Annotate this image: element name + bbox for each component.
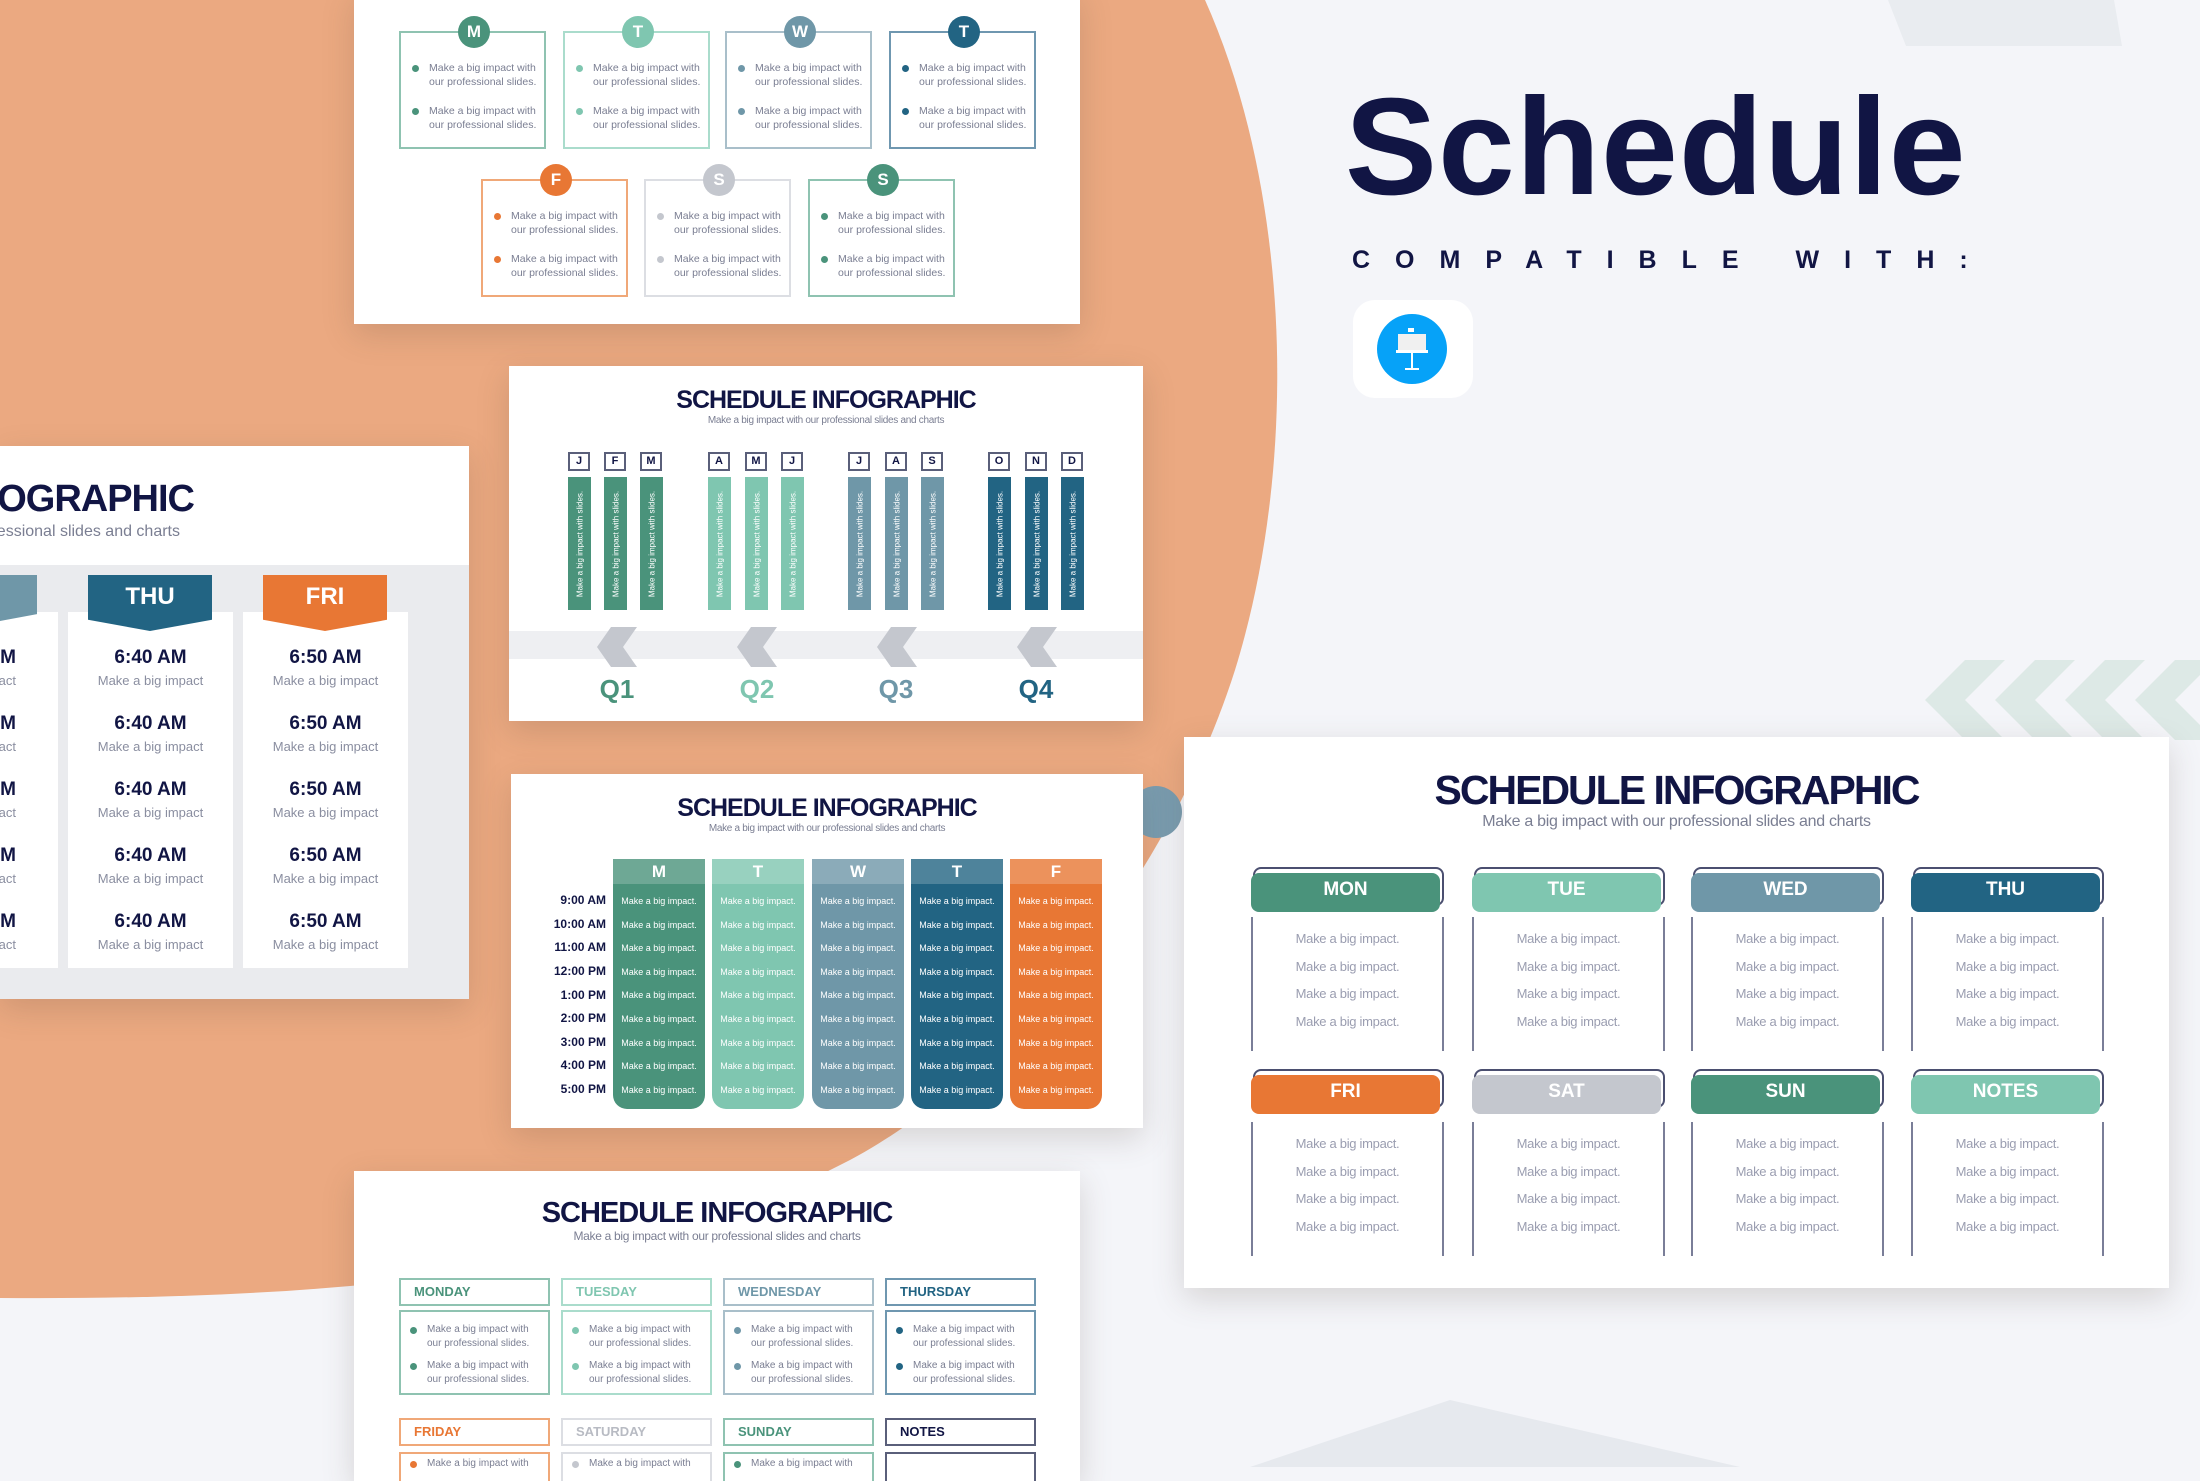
TUE header [1472,867,1665,912]
text: Make a big impact. [820,1038,896,1048]
panel: weekly planner (right): Make a big impact. [1956,1164,2059,1179]
timeline band [509,631,1143,659]
text: Make a big impact. [1018,896,1094,906]
panel: quarterly schedule [509,366,1143,721]
box S2 [808,179,955,297]
FRI header: FRI [1330,1081,1361,1102]
THU times: Make a big impact [98,739,203,754]
text: 5:00 PM [561,1082,606,1096]
text: Make a big impact. [919,896,995,906]
TUESDAY: TUESDAY [576,1284,637,1299]
TUE header: TUE [1548,879,1586,900]
FRI times: Make a big impact [273,673,378,688]
box T2: Make a big impact with [919,105,1026,117]
heading: SCHEDULE INFOGRAPHIC [1435,767,1918,813]
text: Make a big impact. [919,1014,995,1024]
FRI times: Make a big impact [273,739,378,754]
row2 contents: Make a big impact. [1296,1164,1399,1179]
THU header: THU [1986,879,2025,900]
THU times: 6:40 AM [114,713,187,734]
text: Make a big impact. [720,1038,796,1048]
THU times: Make a big impact [98,937,203,952]
text: D [1068,455,1076,467]
row1 contents: Make a big impact. [1296,986,1399,1001]
box S: Make a big impact with [674,253,781,265]
panel: daily boxes (bottom): Make a big impact with [427,1458,529,1469]
decorative chevrons right [1925,660,2200,740]
text: A [892,455,900,467]
text: Make a big impact. [720,920,796,930]
box T2: Make a big impact with [919,62,1026,74]
text: Make a big impact. [820,1061,896,1071]
panel: daily boxes (bottom): our professional slides. [427,1338,529,1349]
box F: Make a big impact with [511,253,618,265]
panel: weekly planner (right): Make a big impact. [1736,959,1839,974]
text: Make a big impact. [720,1061,796,1071]
text: Make a big impact with slides. [611,490,620,597]
box S2: Make a big impact with [838,210,945,222]
panel: weekly planner (right): Make a big impact. [1956,959,2059,974]
grey area: THU [125,583,175,610]
THU times: Make a big impact [98,673,203,688]
text: Make a big impact. [621,967,697,977]
text: Make a big impact. [621,1085,697,1095]
FRI times: 6:50 AM [289,713,362,734]
text: Q1 [600,674,634,704]
panel: left time columns [0,446,469,999]
text: 2:00 PM [561,1011,606,1025]
row2 contents [1251,1122,1444,1256]
box F [481,179,628,297]
panel: daily boxes (bottom) [354,1171,1080,1481]
panel: weekly planner (right): Make a big impact. [1517,1219,1620,1234]
text: Make a big impact. [621,943,697,953]
panel: daily boxes (bottom): our professional slides. [427,1374,529,1385]
panel: daily boxes (bottom): Make a big impact with [913,1324,1015,1335]
box F: F [551,170,561,189]
text: Make a big impact. [919,920,995,930]
text: Make a big impact. [919,1061,995,1071]
time labels [554,893,606,1096]
MONDAY: MONDAY [414,1284,471,1299]
row1 contents: Make a big impact. [1296,931,1399,946]
text: Make a big impact. [720,967,796,977]
heading: SCHEDULE INFOGRAPHIC [676,386,976,414]
panel: daily boxes (bottom): Make a big impact with [589,1458,691,1469]
box S: our professional slides. [674,267,781,279]
text: 11:00 AM [554,940,606,954]
text: Q2 [740,674,774,704]
subheading: Make a big impact with our professional slides and charts [573,1229,861,1243]
NOTES header: NOTES [1973,1081,2038,1102]
panel: weekly planner (right): Make a big impact. [1517,959,1620,974]
box S2: our professional slides. [838,267,945,279]
panel: daily boxes (bottom): our professional slides. [913,1374,1015,1385]
panel: daily boxes (bottom): our professional slides. [751,1374,853,1385]
box T [563,31,710,149]
subheading: Make a big impact with our professional slides and charts [1482,813,1871,830]
box T: our professional slides. [593,76,700,88]
text: S [928,455,936,467]
text: Make a big impact with slides. [1068,490,1077,597]
FRI times: Make a big impact [273,871,378,886]
FRI times: 6:50 AM [289,779,362,800]
text: 1:00 PM [561,988,606,1002]
box S [644,179,791,297]
THU times: 6:40 AM [114,647,187,668]
text: Make a big impact. [621,1061,697,1071]
text: M [646,455,656,467]
panel: weekly planner (right): Make a big impact. [1517,1164,1620,1179]
text: Make a big impact. [720,1085,796,1095]
FRI times: 6:50 AM [289,911,362,932]
WEDNESDAY: WEDNESDAY [738,1284,821,1299]
text: M [751,455,761,467]
text: Make a big impact. [1018,943,1094,953]
panel: daily boxes (bottom): our professional slides. [751,1338,853,1349]
box F: our professional slides. [511,224,618,236]
panel: daily boxes (bottom): Make a big impact with [751,1360,853,1371]
SATURDAY: SATURDAY [576,1424,646,1439]
box M [399,31,546,149]
text: O [995,455,1003,467]
panel: daily boxes (bottom): Make a big impact with [427,1360,529,1371]
box M: our professional slides. [429,76,536,88]
text: Make a big impact with slides. [752,490,761,597]
heading: SCHEDULE INFOGRAPHIC [677,794,977,822]
arrow chevrons [597,627,1057,667]
box T: T [633,22,643,41]
text: F [1051,862,1061,881]
grey area: FRI [306,583,344,610]
text: Make a big impact. [820,943,896,953]
text: Make a big impact. [1018,967,1094,977]
FRIDAY [399,1418,550,1446]
text: Q3 [879,674,913,704]
panel: daily boxes (bottom): Make a big impact with [589,1324,691,1335]
NOTES header [1911,1069,2104,1114]
box W: W [792,22,808,41]
box W: Make a big impact with [755,105,862,117]
text: N [1032,455,1040,467]
box T: Make a big impact with [593,62,700,74]
NOTES: NOTES [900,1424,945,1439]
text: Make a big impact. [621,990,697,1000]
SUNDAY: SUNDAY [738,1424,792,1439]
box F: our professional slides. [511,267,618,279]
text: Make a big impact. [820,967,896,977]
panel: weekly planner (right): Make a big impact. [1956,1014,2059,1029]
decorative grey trapezoid bottom [1251,1400,1739,1467]
box S: Make a big impact with [674,210,781,222]
icon: keynote [1353,300,1473,398]
column FRI [243,612,408,968]
box S2: our professional slides. [838,224,945,236]
text: Make a big impact. [720,896,796,906]
panel: weekly planner (right): Make a big impact. [1517,1136,1620,1151]
text: F [612,455,618,467]
text: Make a big impact. [720,1014,796,1024]
TUESDAY [561,1278,712,1306]
text: Q4 [1019,674,1053,704]
panel: weekly planner (right): Make a big impact. [1956,931,2059,946]
box T2: our professional slides. [919,119,1026,131]
FRI times: 6:50 AM [289,647,362,668]
WEDNESDAY [723,1278,874,1306]
SAT header [1472,1069,1665,1114]
text: T [952,862,962,881]
panel: daily boxes (bottom): Make a big impact with [751,1458,853,1469]
SUNDAY [723,1418,874,1446]
text: Make a big impact with slides. [995,490,1004,597]
panel: weekly planner (right): Make a big impact. [1517,931,1620,946]
quarter labels [600,674,1054,704]
subheading: Make a big impact with our professional slides and charts [708,415,944,426]
SAT header: SAT [1548,1081,1585,1102]
text: 4:00 PM [561,1058,606,1072]
decorative grey parallelogram top right [1888,0,2122,46]
row1 contents: Make a big impact. [1296,1014,1399,1029]
column WED partial [0,612,58,968]
text: Make a big impact with slides. [715,490,724,597]
FRI times: Make a big impact [273,937,378,952]
SUN header [1691,1069,1884,1114]
text: Make a big impact. [720,943,796,953]
box M: Make a big impact with [429,105,536,117]
text: Make a big impact with slides. [575,490,584,597]
box S2: S [877,170,889,189]
text: Make a big impact. [919,1085,995,1095]
month labels and bars [568,452,1084,610]
box T: our professional slides. [593,119,700,131]
MON header [1251,867,1444,912]
panel: weekly planner (right): Make a big impact. [1736,931,1839,946]
THU times: Make a big impact [98,805,203,820]
text: Make a big impact. [1018,1014,1094,1024]
THU times: 6:40 AM [114,779,187,800]
panel: weekly planner (right): Make a big impact. [1517,1191,1620,1206]
box T: Make a big impact with [593,105,700,117]
panel: weekly planner (right) [1184,737,2169,1288]
THU times [98,647,204,952]
text: Make a big impact. [621,1038,697,1048]
text: Make a big impact. [621,1014,697,1024]
text: Make a big impact. [1018,1061,1094,1071]
text: Make a big impact. [919,943,995,953]
box W: Make a big impact with [755,62,862,74]
THURSDAY [885,1278,1036,1306]
FRI header [1251,1069,1444,1114]
panel: daily boxes (bottom): Make a big impact with [751,1324,853,1335]
text: A [715,455,723,467]
box W [725,31,872,149]
compatible with label: COMPATIBLE WITH: [1352,246,1993,274]
FRI times: Make a big impact [273,805,378,820]
box M: Make a big impact with [429,62,536,74]
heading: SCHEDULE INFOGRAPHIC [542,1197,892,1229]
THU times: 6:40 AM [114,911,187,932]
panel: daily boxes (bottom): Make a big impact with [589,1360,691,1371]
box W: our professional slides. [755,76,862,88]
box S2: Make a big impact with [838,253,945,265]
box M: M [467,22,481,41]
FRI times: 6:50 AM [289,845,362,866]
panel: daily boxes (bottom): Make a big impact with [427,1324,529,1335]
box T2 [889,31,1036,149]
panel: weekly planner (right): Make a big impact. [1956,986,2059,1001]
text: Make a big impact. [919,967,995,977]
THU times: Make a big impact [98,871,203,886]
text: 3:00 PM [561,1035,606,1049]
text: J [576,455,582,467]
grey area [0,565,469,999]
text: 10:00 AM [554,917,606,931]
panel: daily boxes (bottom): our professional slides. [589,1338,691,1349]
MONDAY [399,1278,550,1306]
box S: our professional slides. [674,224,781,236]
text: Make a big impact with slides. [928,490,937,597]
row2 contents: Make a big impact. [1296,1136,1399,1151]
text: Make a big impact. [720,990,796,1000]
day columns [613,859,1102,1109]
text: Make a big impact. [820,990,896,1000]
title: Schedule [1345,70,1967,224]
row2 contents: Make a big impact. [1296,1219,1399,1234]
decorative dot [1130,786,1182,838]
text: Make a big impact with slides. [647,490,656,597]
text: Make a big impact. [919,990,995,1000]
subheading: Make a big impact with our professional slides and charts [709,823,945,834]
text: Make a big impact. [1018,1085,1094,1095]
column THU [68,612,233,968]
text: Make a big impact. [1018,920,1094,930]
box S: S [713,170,725,189]
text: Make a big impact. [1018,990,1094,1000]
panel: weekly planner (right): Make a big impact. [1736,1136,1839,1151]
text: Make a big impact. [1018,1038,1094,1048]
row1 contents [1251,917,1444,1051]
THU times: 6:40 AM [114,845,187,866]
box T2: T [959,22,969,41]
panel: weekly planner (right): Make a big impact. [1736,1191,1839,1206]
MON header: MON [1323,879,1368,900]
FRIDAY: FRIDAY [414,1424,461,1439]
panel: daily boxes (bottom): our professional slides. [913,1338,1015,1349]
text: T [753,862,763,881]
text: Make a big impact. [621,896,697,906]
panel: weekly planner (right): Make a big impact. [1736,1164,1839,1179]
panel: weekly planner (right): Make a big impact. [1736,986,1839,1001]
text: Make a big impact with slides. [1032,490,1041,597]
text: Make a big impact. [621,920,697,930]
box F: Make a big impact with [511,210,618,222]
text: M [652,862,666,881]
FRI times [273,647,378,952]
panel: weekly planner (right): Make a big impact. [1956,1219,2059,1234]
NOTES [885,1418,1036,1446]
row1 contents: Make a big impact. [1296,959,1399,974]
text: 12:00 PM [554,964,606,978]
row2 contents: Make a big impact. [1296,1191,1399,1206]
text: Make a big impact with slides. [788,490,797,597]
text: Make a big impact with slides. [892,490,901,597]
panel: weekly planner (right): Make a big impact. [1736,1219,1839,1234]
text: Make a big impact with slides. [855,490,864,597]
panel: weekly planner (right): Make a big impact. [1736,1014,1839,1029]
WED header: WED [1763,879,1808,900]
text: Make a big impact. [820,896,896,906]
panel: daily boxes (bottom): Make a big impact with [913,1360,1015,1371]
WED header [1691,867,1884,912]
panel: weekly boxes (top) [354,0,1080,324]
text: Make a big impact. [820,920,896,930]
text: Make a big impact. [820,1014,896,1024]
text: Make a big impact. [919,1038,995,1048]
box T2: our professional slides. [919,76,1026,88]
THURSDAY: THURSDAY [900,1284,971,1299]
panel: weekly planner (right): Make a big impact. [1517,1014,1620,1029]
text: J [789,455,795,467]
panel: weekly planner (right): Make a big impact. [1517,986,1620,1001]
SUN header: SUN [1765,1081,1806,1102]
box W: our professional slides. [755,119,862,131]
text: J [856,455,862,467]
text: Make a big impact. [820,1085,896,1095]
panel: weekly planner (right): Make a big impact. [1956,1191,2059,1206]
panel: weekly planner (right): Make a big impact. [1956,1136,2059,1151]
box M: our professional slides. [429,119,536,131]
panel: daily boxes (bottom): our professional slides. [589,1374,691,1385]
text: W [850,862,866,881]
text: 9:00 AM [560,893,606,907]
THU header [1911,867,2104,912]
SATURDAY [561,1418,712,1446]
WED partial times [0,647,16,952]
panel: hourly schedule [511,774,1143,1128]
